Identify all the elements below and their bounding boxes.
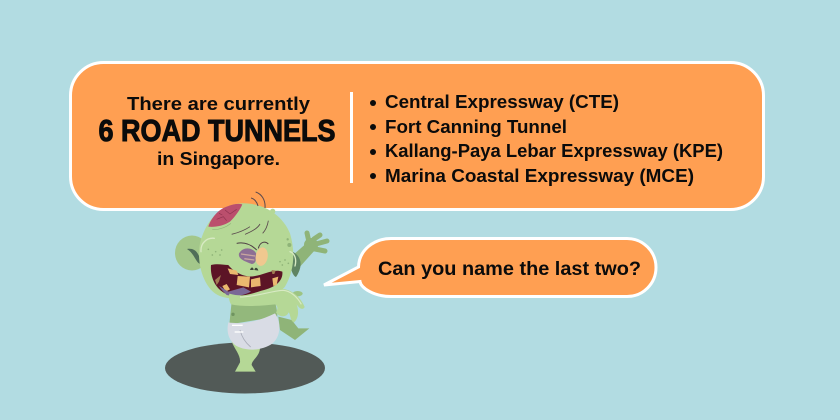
heading: road tunnels count: 6 ROAD TUNNELS xyxy=(98,113,336,148)
cheek details xyxy=(201,238,296,266)
far arm and hand xyxy=(290,233,327,277)
wrinkles xyxy=(232,221,268,234)
icon: zombie baby character xyxy=(165,192,327,394)
nostrils xyxy=(250,267,258,271)
heading: road tunnels count: There are currently xyxy=(127,94,310,114)
front arm and hand xyxy=(229,289,305,322)
heading: road tunnels count xyxy=(98,94,336,169)
panel: main speech bubble xyxy=(70,62,764,210)
list of tunnels: Kallang-Paya Lebar Expressway (KPE) xyxy=(385,141,723,161)
list of tunnels: Marina Coastal Expressway (MCE) xyxy=(385,166,694,186)
head xyxy=(199,192,296,299)
list of tunnels: Central Expressway (CTE) xyxy=(385,92,619,112)
callout: question bubble: Can you name the last two? xyxy=(378,259,641,280)
exposed brain xyxy=(208,204,242,229)
list of tunnels: Fort Canning Tunnel xyxy=(385,117,567,137)
teeth xyxy=(222,268,278,292)
list of tunnels xyxy=(370,92,723,186)
eyes xyxy=(237,242,269,267)
tongue xyxy=(219,286,251,296)
open mouth xyxy=(211,264,282,296)
heading: road tunnels count: in Singapore. xyxy=(157,149,280,169)
hair xyxy=(251,192,265,208)
callout: question bubble xyxy=(324,238,656,296)
ground shadow xyxy=(165,342,325,394)
ear xyxy=(175,236,209,270)
zombie body xyxy=(228,302,309,372)
